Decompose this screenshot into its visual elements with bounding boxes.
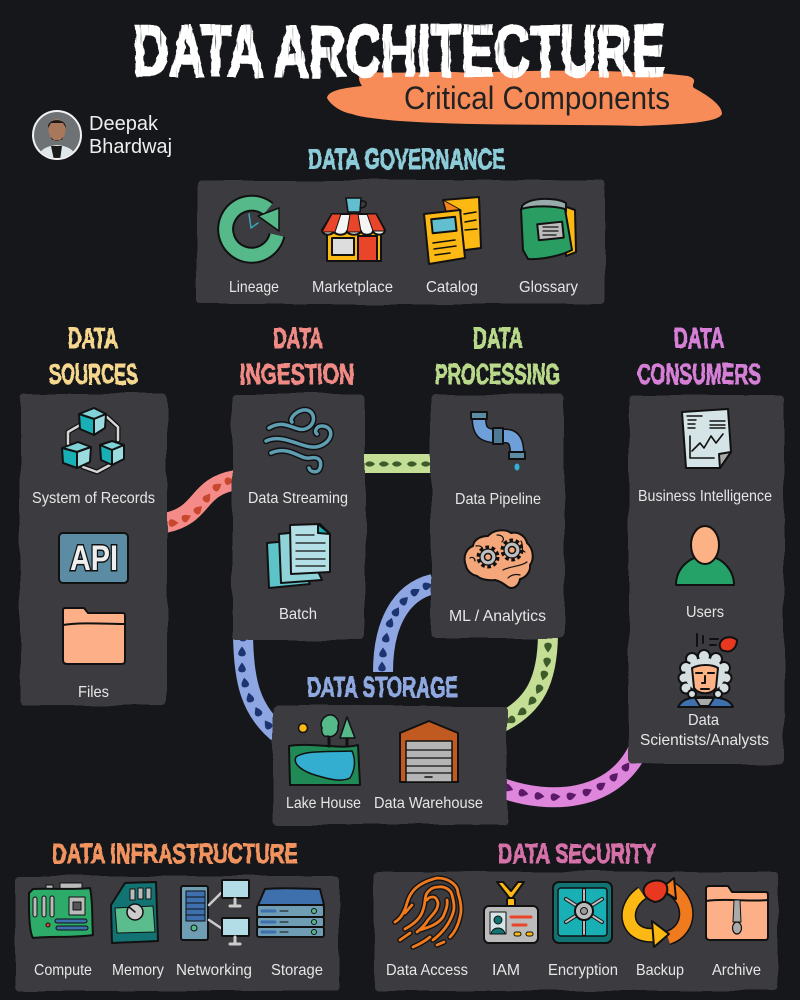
section: data security [374, 838, 778, 991]
icon: networking [181, 880, 249, 944]
label: users: Users [686, 604, 724, 621]
subtitle banner [327, 71, 722, 126]
section: data governance [197, 144, 605, 304]
heading: data infrastructure: DATA INFRASTRUCTURE [52, 838, 298, 869]
label: lineage: Lineage [229, 279, 279, 296]
author avatar [32, 110, 82, 162]
icon: lineage [226, 203, 279, 255]
author name [89, 113, 172, 158]
connector: ingestion to processing [363, 461, 435, 467]
icon: data warehouse [400, 721, 458, 782]
icon: catalog [424, 197, 481, 264]
connector: processing to storage [378, 581, 433, 672]
icon: business intelligence report [682, 409, 731, 468]
icon: storage servers [257, 888, 324, 937]
icon: encryption safe [553, 882, 612, 943]
heading: data sources: SOURCES [49, 359, 138, 391]
label: data scientists analysts [640, 712, 769, 749]
heading: data ingestion: DATA [273, 323, 323, 355]
icon: data pipeline [471, 412, 525, 470]
icon: memory card [111, 882, 158, 943]
icon: users [676, 526, 734, 585]
heading: data sources [49, 323, 138, 391]
label: data pipeline: Data Pipeline [455, 491, 541, 508]
label: data scientists analysts: Data [688, 712, 719, 729]
icon: marketplace [322, 198, 385, 261]
label: networking: Networking [176, 962, 252, 979]
icon: ml analytics brain [465, 530, 533, 588]
heading: data processing [435, 323, 560, 391]
heading: data storage: DATA STORAGE [307, 672, 458, 704]
label: glossary: Glossary [519, 279, 578, 296]
icon: system of records [62, 408, 124, 472]
label: encryption: Encryption [548, 962, 618, 979]
author name: Deepak [89, 113, 159, 135]
label: backup: Backup [636, 962, 684, 979]
label: compute: Compute [34, 962, 92, 979]
section: data consumers [629, 323, 784, 764]
label: iam: IAM [492, 962, 520, 979]
label: storage: Storage [271, 962, 323, 979]
label: data warehouse: Data Warehouse [374, 795, 483, 812]
icon: files folder [63, 608, 125, 664]
icon: API: API [70, 539, 118, 578]
icon: compute motherboard [29, 883, 93, 938]
label: archive: Archive [712, 962, 761, 979]
label: catalog: Catalog [426, 279, 478, 296]
connector: processing to warehouse [500, 632, 552, 726]
icon: batch documents [267, 524, 330, 588]
section: data processing [431, 323, 564, 638]
label: system of records: System of Records [32, 490, 155, 507]
section: data sources [20, 323, 167, 706]
label: lake house: Lake House [286, 795, 361, 812]
label: data streaming: Data Streaming [248, 490, 348, 507]
icon: lake house [289, 715, 360, 785]
icon: archive zipped folder [706, 886, 768, 940]
label: data scientists analysts: Scientists/Analysts [640, 732, 769, 749]
heading: data processing: DATA [473, 323, 523, 355]
heading: data processing: PROCESSING [435, 359, 560, 391]
heading: data security: DATA SECURITY [498, 838, 656, 869]
label: files: Files [78, 684, 109, 701]
heading: data consumers: DATA [674, 323, 724, 355]
label: batch: Batch [279, 606, 317, 623]
heading: data consumers [637, 323, 761, 391]
connector: storage to consumers [502, 748, 639, 801]
icon: data scientist [678, 634, 737, 707]
heading: data ingestion: INGESTION [240, 359, 354, 391]
heading: data ingestion [240, 323, 354, 391]
author name: Bhardwaj [89, 136, 172, 158]
label: ml analytics: ML / Analytics [449, 608, 546, 625]
icon: glossary [521, 199, 576, 259]
section: data infrastructure [15, 838, 339, 991]
connector: ingestion to storage [238, 630, 282, 736]
icon: IAM badge [484, 882, 538, 943]
label: data access: Data Access [386, 962, 468, 979]
label: business intelligence: Business Intelligence [638, 488, 772, 505]
subtitle banner: Critical Components [404, 80, 670, 116]
icon: data streaming wind [266, 410, 331, 472]
label: marketplace: Marketplace [312, 279, 393, 296]
section: data storage [273, 672, 507, 825]
icon: data access fingerprint [395, 878, 461, 947]
icon: backup arrows [629, 878, 686, 947]
section: data ingestion [232, 323, 365, 640]
label: memory: Memory [112, 962, 164, 979]
connector: sources to ingestion [165, 476, 236, 527]
heading: data governance: DATA GOVERNANCE [308, 144, 505, 176]
heading: data sources: DATA [68, 323, 118, 355]
icon: API [59, 533, 128, 583]
